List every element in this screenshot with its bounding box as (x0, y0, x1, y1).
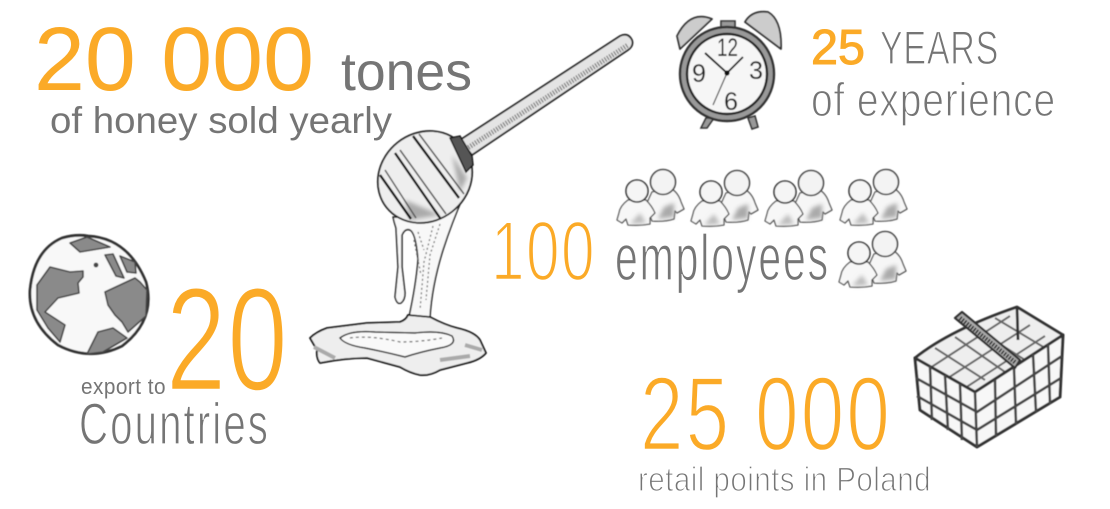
caption: of honey sold yearly: of honey sold yearly (50, 100, 393, 141)
clock numerals (692, 34, 763, 116)
icon: people pair 1 (617, 170, 684, 225)
basket inner back wall (915, 307, 1063, 392)
clock hands (705, 53, 743, 73)
number: 20: 20 (166, 258, 289, 422)
basket weave inside (930, 316, 1045, 388)
clock numerals: 6 (724, 88, 738, 116)
stat: honey sold yearly (34, 10, 472, 141)
unit: tones: tones (341, 43, 472, 102)
clock numerals: 3 (749, 57, 763, 85)
icon: globe (30, 235, 148, 354)
caption: employees: employees (615, 221, 830, 294)
stat: retail points (638, 356, 931, 499)
basket outer wall (915, 335, 1063, 447)
caption: retail points in Poland: retail points in Poland (638, 461, 931, 499)
icons: employee pairs (617, 170, 907, 287)
clock numerals: 9 (692, 60, 706, 88)
icon: basket (915, 307, 1063, 447)
clock face (687, 34, 767, 114)
icon: people pair 5 (839, 232, 906, 287)
icon: honey dipper (310, 35, 632, 375)
dipper grooves (380, 136, 459, 219)
stat: years of experience (811, 21, 1056, 126)
number: 25: 25 (811, 21, 865, 75)
icon: people pair 4 (840, 170, 907, 225)
unit: YEARS: YEARS (880, 21, 999, 74)
icon: alarm clock (677, 12, 781, 129)
honey stream (393, 195, 464, 317)
icon: people pair 2 (691, 170, 758, 226)
caption: Countries: Countries (79, 392, 270, 457)
number: 100: 100 (491, 204, 596, 298)
label: export to: export to (81, 374, 166, 399)
globe outline (30, 235, 148, 354)
clock numerals: 12 (717, 34, 738, 62)
stat: export countries (79, 258, 289, 457)
number: 20 000: 20 000 (34, 10, 314, 110)
basket weave outside (930, 344, 1050, 447)
number: 25 000: 25 000 (640, 356, 892, 473)
icon: people pair 3 (765, 170, 832, 226)
dipper head (359, 112, 491, 242)
dipper collar (450, 136, 473, 172)
globe continents (37, 237, 147, 354)
clock body (680, 27, 774, 121)
honey pool (310, 315, 486, 375)
dipper handle (460, 35, 632, 155)
clock top knob and feet (701, 21, 758, 129)
stat: employees (491, 204, 830, 298)
caption: of experience: of experience (811, 73, 1056, 126)
clock bells (677, 17, 712, 49)
basket handle (955, 312, 1020, 368)
